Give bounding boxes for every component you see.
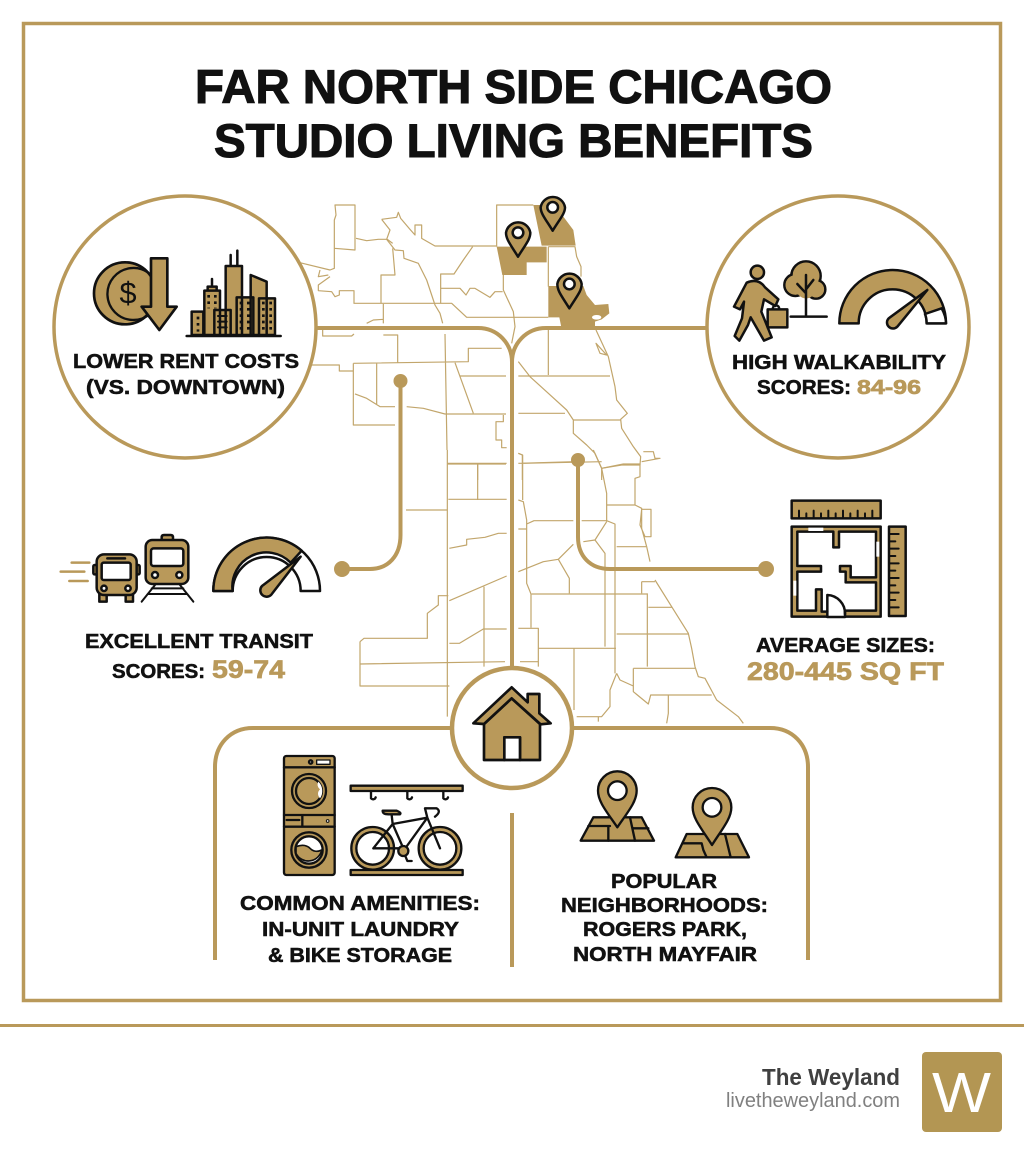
icon: floor plan with rulers <box>792 501 906 617</box>
panel: average sizes <box>747 501 944 686</box>
icon: city skyline <box>187 251 281 336</box>
connector lines <box>215 328 808 967</box>
map: lower lines <box>360 450 743 723</box>
text: common amenities: COMMON AMENITIES: <box>240 893 480 915</box>
text: popular neighborhoods: NORTH MAYFAIR <box>573 944 758 966</box>
icon: house in circle <box>452 668 572 788</box>
text: lower rent costs <box>73 351 299 399</box>
text: lower rent costs: (VS. DOWNTOWN) <box>86 377 285 399</box>
icon: bike on storage rack <box>351 786 463 875</box>
title: STUDIO LIVING BENEFITS <box>214 114 813 167</box>
text: popular neighborhoods: POPULAR <box>611 871 718 893</box>
text: high walkability <box>732 352 947 399</box>
panel: lower rent costs <box>54 196 316 458</box>
text: popular neighborhoods: ROGERS PARK, <box>583 919 747 941</box>
text: excellent transit: 59-74 <box>212 656 285 684</box>
footer brand text <box>726 1064 900 1112</box>
logo: W <box>932 1061 991 1125</box>
text: average sizes <box>747 635 944 686</box>
text: common amenities <box>240 893 480 967</box>
icon: walker, tree and gauge <box>734 261 946 341</box>
text: average sizes: 280-445 SQ FT <box>747 658 944 686</box>
title <box>195 60 832 167</box>
text: average sizes: AVERAGE SIZES: <box>756 635 935 657</box>
text: excellent transit: EXCELLENT TRANSIT <box>85 631 313 653</box>
icon: coin and down arrow: $ <box>119 276 137 310</box>
text: high walkability: HIGH WALKABILITY <box>732 352 947 374</box>
map pins <box>506 197 582 308</box>
logo <box>922 1052 1002 1132</box>
map of Chicago <box>300 197 743 723</box>
text: high walkability: SCORES: <box>757 377 851 399</box>
panel: high walkability <box>707 196 969 458</box>
text: popular neighborhoods: NEIGHBORHOODS: <box>561 895 768 917</box>
footer brand text: livetheweyland.com <box>726 1089 900 1112</box>
text: popular neighborhoods <box>561 871 768 966</box>
footer divider <box>0 1024 1024 1027</box>
title: FAR NORTH SIDE CHICAGO <box>195 60 832 113</box>
panel: common amenities <box>240 756 480 967</box>
text: excellent transit <box>85 631 313 684</box>
text: common amenities: & BIKE STORAGE <box>268 945 452 967</box>
panel: excellent transit <box>61 535 320 684</box>
text: high walkability: 84-96 <box>857 377 921 399</box>
text: lower rent costs: LOWER RENT COSTS <box>73 351 299 373</box>
map: highlighted neighborhoods and upper lines <box>300 205 660 480</box>
icon: two map pins on maps <box>581 771 749 857</box>
icon: stacked washer and dryer <box>284 756 335 875</box>
icon: coin and down arrow <box>94 258 177 330</box>
text: common amenities: IN-UNIT LAUNDRY <box>262 919 460 941</box>
text: excellent transit: SCORES: <box>112 661 205 683</box>
panel: popular neighborhoods <box>561 771 768 966</box>
footer brand text: The Weyland <box>762 1064 900 1090</box>
icon: bus, train and gauge <box>61 535 320 602</box>
